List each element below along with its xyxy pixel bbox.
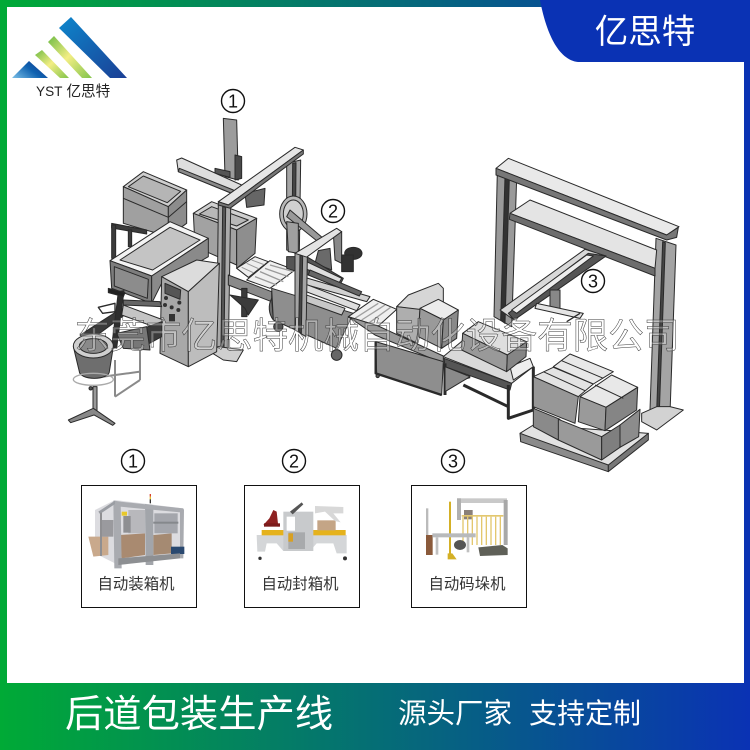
number 2 — [282, 450, 306, 472]
robot arm — [500, 249, 606, 322]
number 2: 2 — [289, 452, 299, 472]
footer banner text — [65, 693, 641, 736]
number 1: 1 — [128, 452, 138, 472]
palletizer left post — [494, 172, 517, 327]
sealer plate — [315, 248, 332, 270]
product card 2: case sealer — [244, 450, 360, 608]
card border — [244, 486, 360, 608]
infeed table frame — [112, 223, 147, 258]
header brand name: 亿思特 — [595, 14, 695, 51]
sealer gantry — [295, 228, 342, 337]
feed tray — [110, 222, 208, 303]
logo text: YST 亿思特 — [36, 83, 110, 100]
upper carton layer — [533, 354, 638, 431]
palletizer right post — [642, 238, 683, 430]
watermark company name: 东莞市亿思特机械自动化设备有限公司 — [75, 316, 679, 356]
chute and conveyor to bowl — [80, 288, 163, 350]
bowl stand — [68, 387, 115, 425]
photo: palletizer — [426, 498, 508, 559]
marker 3 on drawing: 3 — [588, 272, 598, 292]
footer slogan left: 源头厂家 — [398, 698, 512, 730]
marker 2 on drawing: 2 — [328, 202, 338, 222]
palletizer top beam — [496, 158, 679, 240]
outfeed table — [443, 340, 533, 418]
photo: case sealer — [257, 502, 347, 560]
upper left section: packer gantry and cartons — [123, 118, 323, 362]
main gantry — [210, 147, 303, 362]
small hanging box — [245, 188, 265, 207]
production line drawing — [68, 90, 683, 472]
logo mark — [12, 17, 127, 78]
pallet — [520, 425, 648, 472]
carton with gantry — [397, 283, 458, 348]
marker 2 on drawing — [322, 200, 344, 222]
sealer tank body — [269, 288, 353, 360]
palletizer middle beam — [509, 200, 657, 276]
left section: feeder table, cabinet and bowl — [68, 222, 219, 425]
vibratory bowl feeder — [73, 334, 113, 385]
card border — [412, 486, 526, 608]
product card 1: case packer — [82, 450, 196, 608]
conveyor frame legs — [228, 275, 272, 317]
right roller conveyor — [348, 299, 397, 326]
large carton — [123, 172, 187, 237]
header tab — [540, 0, 750, 62]
card border — [82, 486, 196, 608]
sealer rollers — [287, 257, 370, 315]
long carton — [462, 322, 527, 372]
photo: case packer — [88, 494, 184, 568]
sealer motor — [342, 247, 362, 272]
product card 3: palletizer — [412, 450, 526, 608]
sealer tape reel — [280, 196, 323, 243]
center section: conveyors and case sealer — [228, 222, 458, 395]
right section: palletizer — [443, 158, 683, 472]
label: 自动码垛机 — [429, 575, 506, 593]
number 1 — [122, 450, 144, 472]
marker 3 on drawing — [582, 270, 604, 292]
footer slogan right: 支持定制 — [529, 698, 641, 729]
marker 1 on drawing: 1 — [228, 92, 238, 112]
lower carton layer — [533, 408, 640, 460]
vertical column — [215, 118, 242, 180]
center carton — [193, 202, 257, 268]
side frame — [103, 348, 140, 397]
horizontal guide rail — [177, 158, 242, 194]
back sealer post — [287, 222, 342, 263]
control cabinet — [160, 260, 219, 367]
lower conveyor panel — [348, 317, 443, 395]
marker 1 on drawing — [222, 90, 244, 112]
roller conveyor under carton — [237, 257, 295, 288]
number 3 — [442, 450, 464, 472]
number 3: 3 — [448, 452, 458, 472]
company logo — [12, 17, 127, 100]
label: 自动装箱机 — [98, 575, 175, 593]
label: 自动封箱机 — [262, 575, 339, 593]
footer title: 后道包装生产线 — [65, 693, 333, 736]
